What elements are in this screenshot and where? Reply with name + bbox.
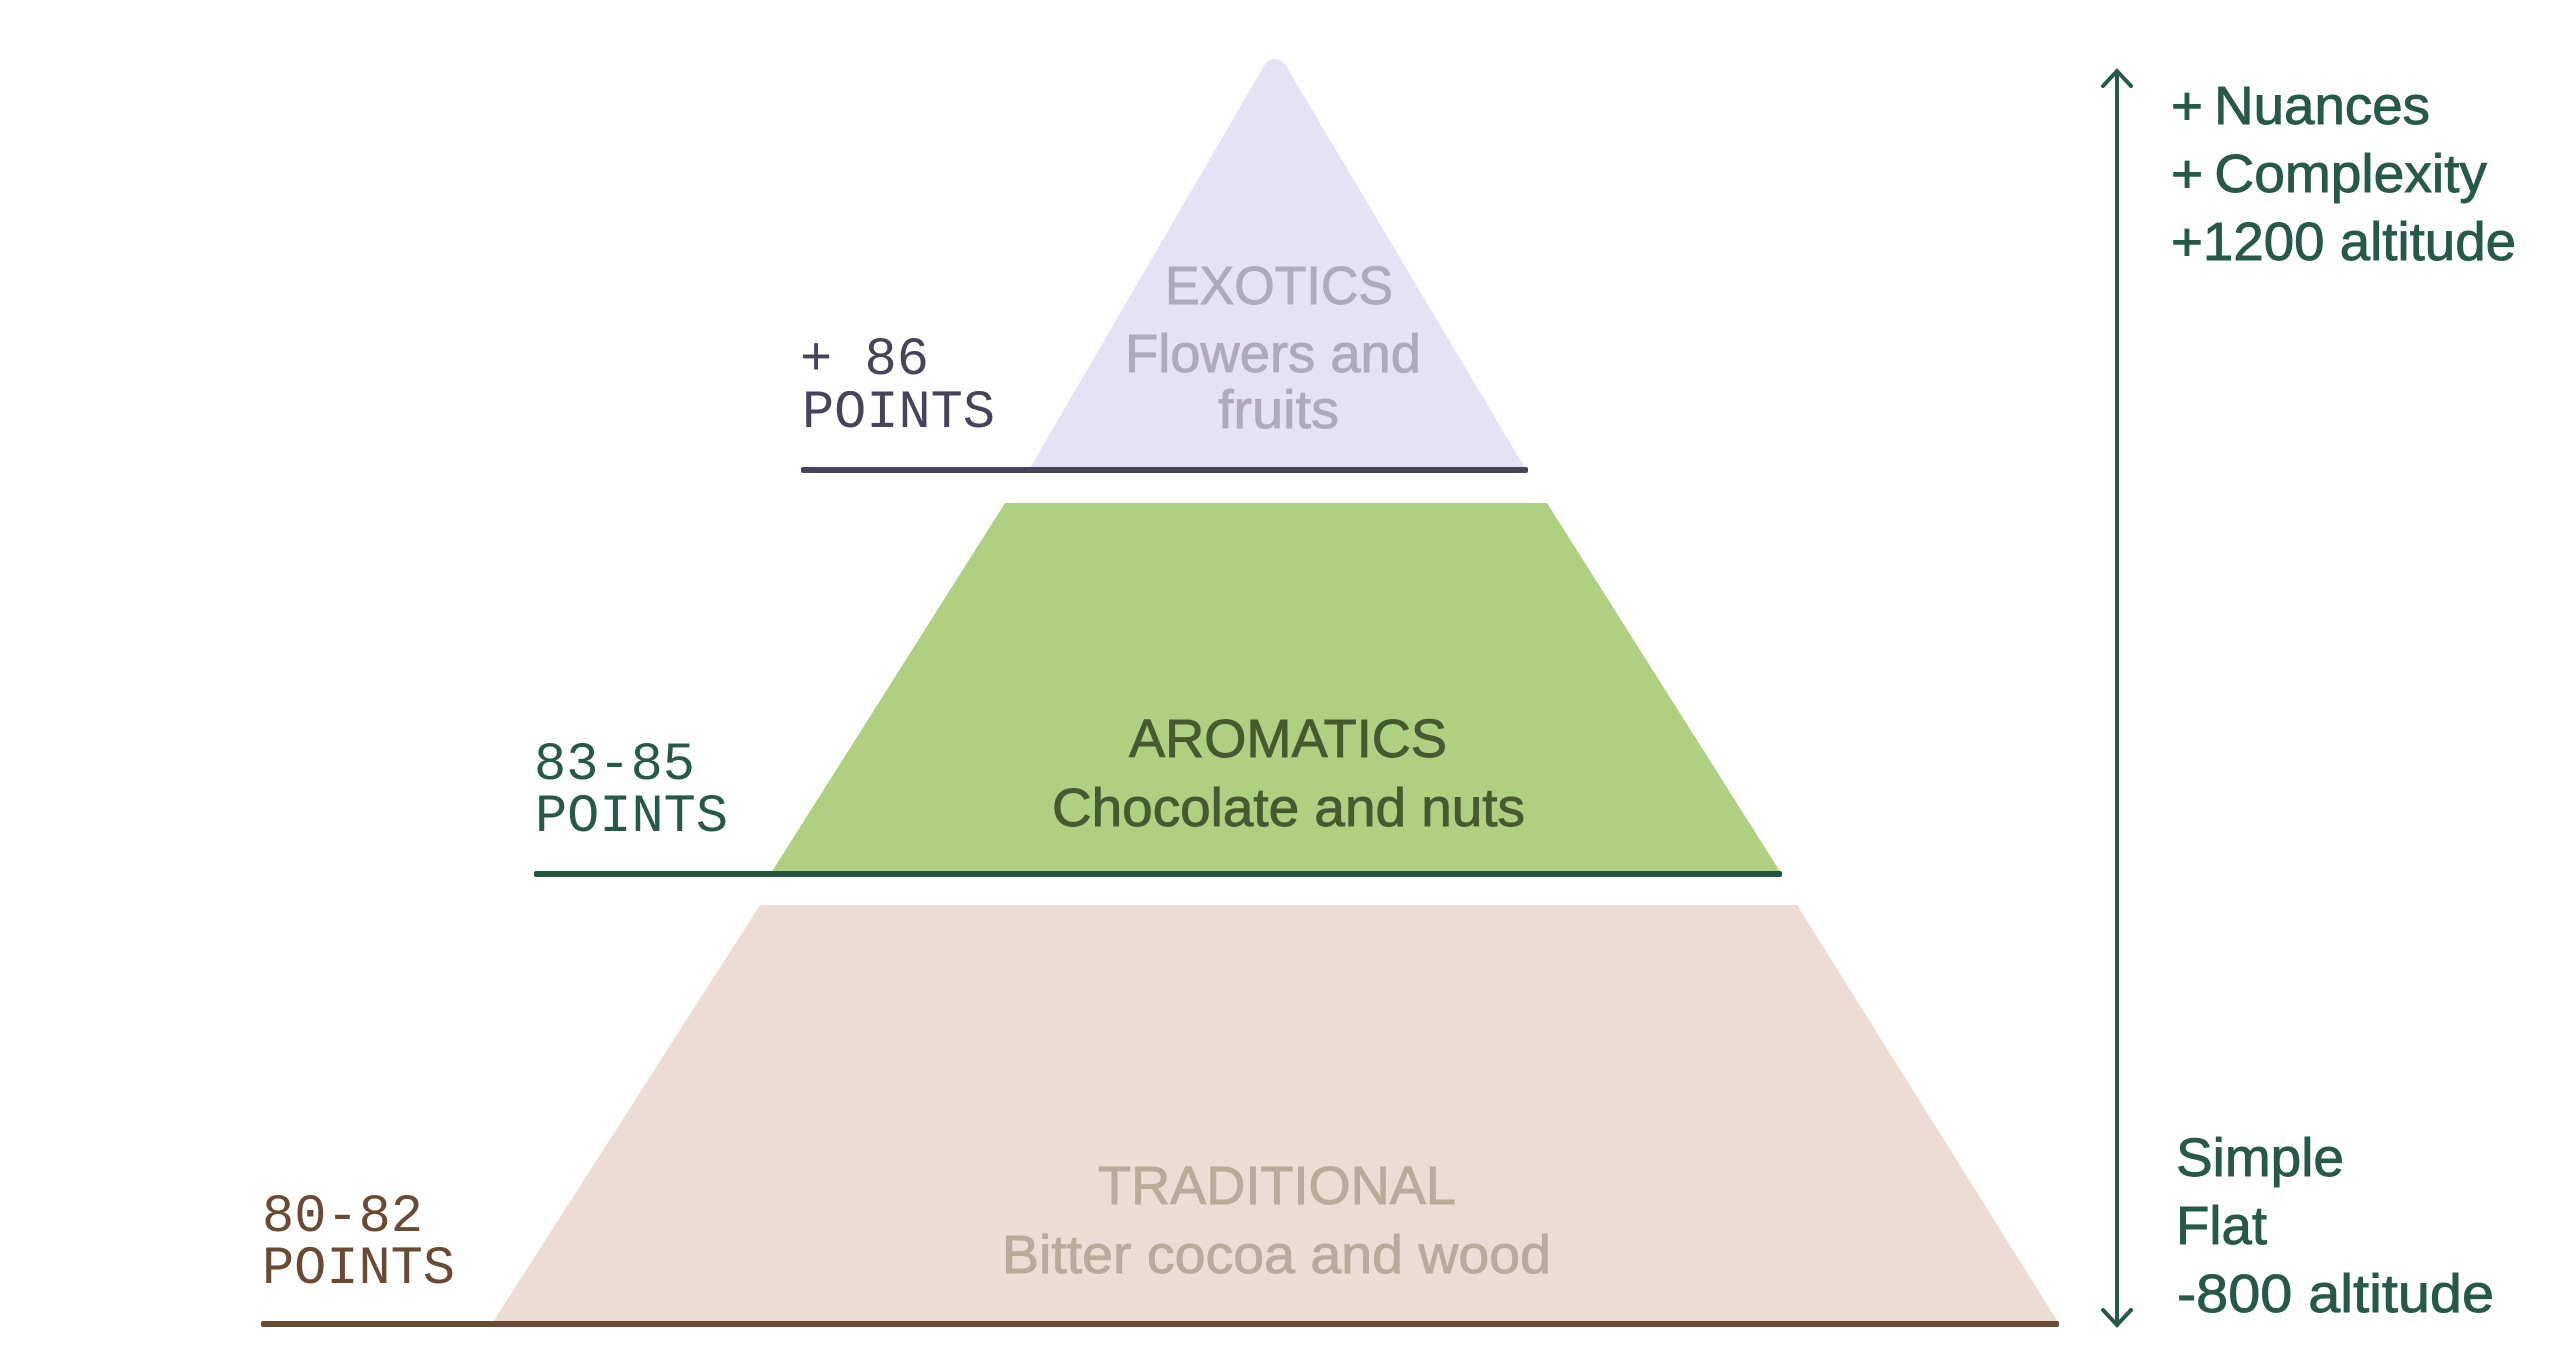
text: high altitude traits: + Nuances (2171, 76, 2430, 136)
text: high altitude traits: + Complexity (2171, 144, 2487, 204)
label: traditional score: POINTS (262, 1239, 455, 1300)
text: exotics description (1125, 256, 1421, 440)
text: exotics description: fruits (1218, 380, 1339, 440)
text: low altitude traits (2176, 1128, 2494, 1324)
text: low altitude traits: Flat (2176, 1196, 2267, 1256)
text: traditional description: TRADITIONAL (1098, 1156, 1456, 1216)
text: aromatics description: AROMATICS (1129, 709, 1447, 769)
label: exotics score: + 86 (800, 330, 929, 391)
line: aromatics baseline (534, 871, 1782, 877)
arrow: double-headed altitude scale (2103, 71, 2131, 1325)
label: aromatics score: POINTS (535, 787, 728, 848)
label: traditional score: 80-82 (262, 1187, 423, 1248)
shape: exotics triangle (1030, 59, 1525, 468)
text: traditional description: Bitter cocoa and wood (1002, 1225, 1551, 1285)
tier: aromatics (534, 503, 1782, 877)
line: traditional baseline (261, 1321, 2059, 1327)
text: aromatics description: Chocolate and nuts (1052, 778, 1525, 838)
tier: traditional (261, 905, 2059, 1327)
label: exotics score: POINTS (802, 383, 995, 444)
shape: aromatics trapezoid (771, 503, 1781, 873)
text: high altitude traits (2171, 76, 2516, 272)
text: low altitude traits: Simple (2176, 1128, 2344, 1188)
label: exotics score (800, 330, 995, 444)
line: exotics baseline (801, 467, 1528, 473)
text: low altitude traits: -800 altitude (2177, 1264, 2494, 1324)
text: exotics description: Flowers and (1125, 324, 1421, 384)
tier: exotics (800, 59, 1528, 473)
shape: traditional trapezoid (493, 905, 2058, 1322)
text: traditional description (1002, 1156, 1551, 1285)
label: traditional score (262, 1187, 455, 1300)
text: high altitude traits: +1200 altitude (2171, 212, 2516, 272)
label: aromatics score (534, 735, 728, 848)
label: aromatics score: 83-85 (534, 735, 695, 796)
text: aromatics description (1052, 709, 1525, 838)
text: exotics description: EXOTICS (1165, 256, 1393, 316)
